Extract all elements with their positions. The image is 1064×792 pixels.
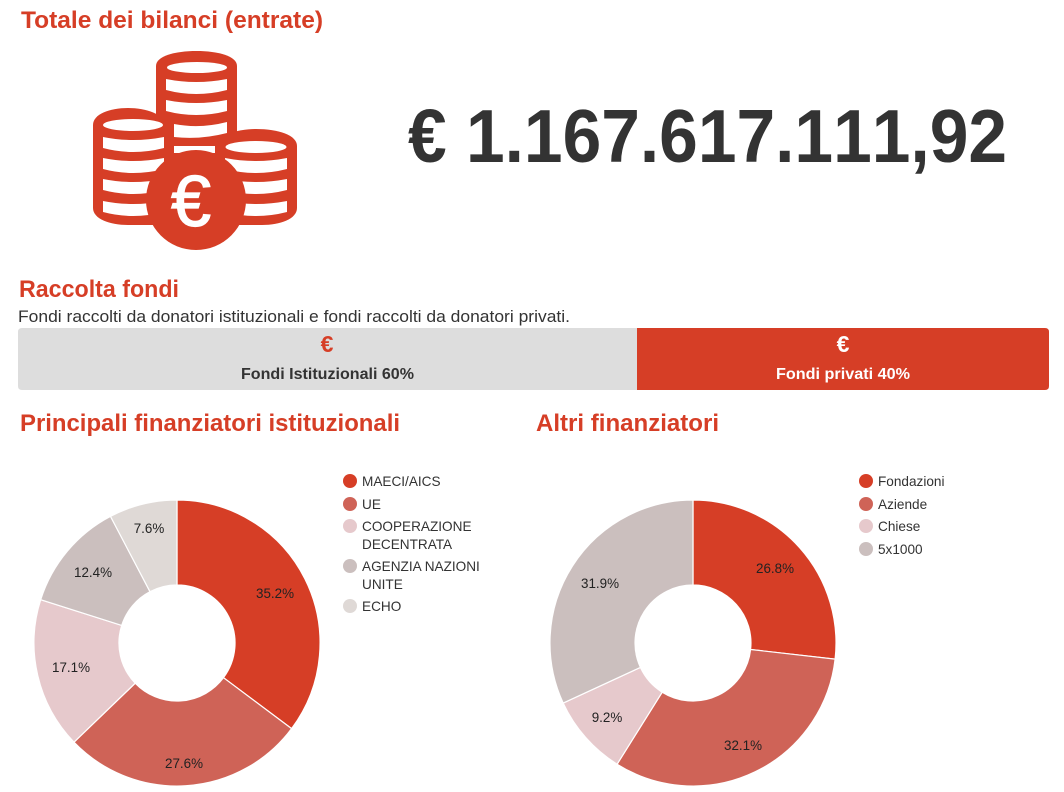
donut chart: principali finanziatori: 35.2% [256,586,294,601]
donut chart: principali finanziatori: 17.1% [52,660,90,675]
donut chart: principali finanziatori: 27.6% [165,756,203,771]
icon: coin stacks with euro [93,51,297,250]
segment: fondi istituzionali 60%: Fondi Istituzionali 60% [241,366,414,383]
donut chart: principali finanziatori [34,500,320,786]
text: raccolta fondi description: Fondi raccolti da donatori istituzionali e fondi raccolti da donatori privati. [18,307,570,326]
legend: altri finanziatori [859,474,945,557]
legend: principali finanziatori: UE [362,497,381,512]
legend: principali finanziatori [343,474,480,614]
donut chart: altri finanziatori: 31.9% [581,576,619,591]
legend: principali finanziatori: MAECI/AICS [362,474,441,489]
donut chart: altri finanziatori: 9.2% [592,710,622,725]
donut chart: principali finanziatori: 12.4% [74,565,112,580]
donut chart: principali finanziatori: 7.6% [134,521,164,536]
donut chart: altri finanziatori: 32.1% [724,738,762,753]
legend: altri finanziatori: Fondazioni [878,474,945,489]
segment: fondi istituzionali 60%: € [321,331,334,357]
total amount: € 1.167.617.111,92 [408,94,1007,178]
heading: altri finanziatori: Altri finanziatori [536,410,719,437]
heading: principali finanziatori istituzionali: Principali finanziatori istituzionali [20,410,400,437]
segment: fondi istituzionali 60% [18,328,637,390]
heading: raccolta fondi: Raccolta fondi [19,276,179,303]
donut chart: altri finanziatori: 26.8% [756,561,794,576]
segment: fondi privati 40%: Fondi privati 40% [776,366,910,383]
donut chart: altri finanziatori [550,500,836,786]
title: totale dei bilanci: Totale dei bilanci (entrate) [21,7,323,34]
panel: funding split bar [18,328,1049,390]
legend: principali finanziatori: ECHO [362,599,401,614]
segment: fondi privati 40% [637,328,1049,390]
legend: altri finanziatori: Chiese [878,519,920,534]
segment: fondi privati 40%: € [837,331,850,357]
legend: altri finanziatori: 5x1000 [878,542,923,557]
legend: altri finanziatori: Aziende [878,497,927,512]
legend: principali finanziatori: COOPERAZIONE [362,519,472,534]
legend: principali finanziatori: UNITE [362,577,403,592]
icon: coin stacks with euro: € [171,162,211,242]
legend: principali finanziatori: DECENTRATA [362,537,453,552]
legend: principali finanziatori: AGENZIA NAZIONI [362,559,480,574]
